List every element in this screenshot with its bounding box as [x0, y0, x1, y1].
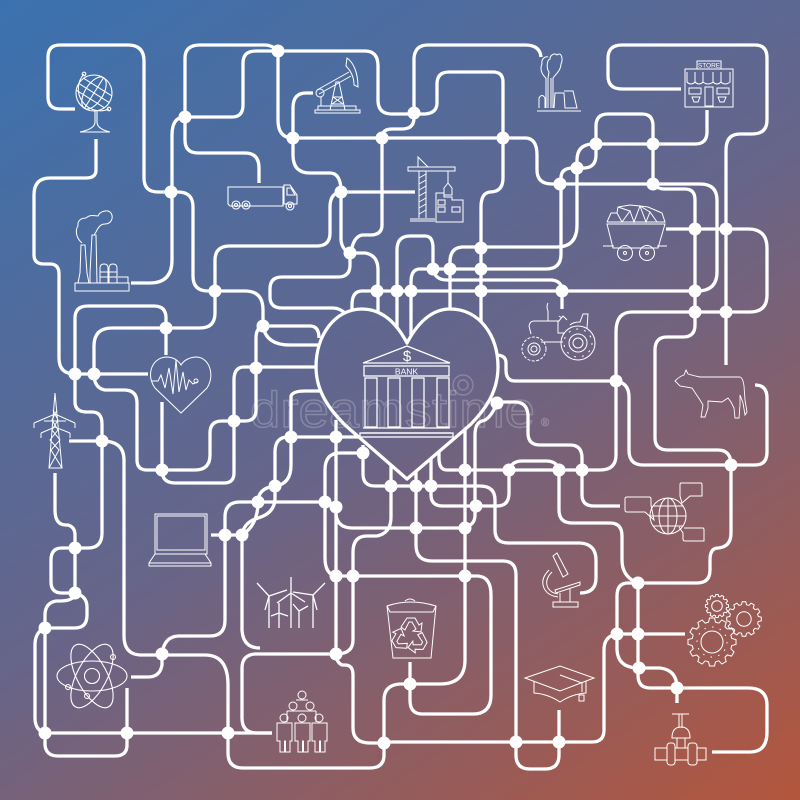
icon: coal cart — [603, 205, 667, 260]
icon: recycling bin — [387, 599, 436, 658]
icon: oil pump jack — [315, 58, 360, 113]
central heart — [316, 309, 498, 479]
watermark: dreamstime — [250, 382, 535, 438]
icon: power plant with cooling towers — [537, 54, 581, 111]
icon: heartbeat heart — [151, 357, 211, 413]
icon: graduation cap — [525, 666, 594, 702]
junction nodes — [38, 44, 738, 750]
icon: electricity pylon — [34, 393, 75, 468]
icon: cow — [675, 370, 747, 418]
icon: microscope — [543, 553, 580, 607]
icon: group of people — [277, 691, 327, 752]
icon: truck — [228, 185, 297, 210]
icon: tractor — [522, 303, 595, 361]
icon: gears — [688, 594, 761, 666]
watermark: ® — [541, 417, 549, 429]
icon: store: STORE — [698, 62, 721, 70]
large gear — [688, 618, 736, 666]
icon: globe with speech boxes — [625, 483, 704, 541]
icon: factory with smoke — [75, 211, 129, 291]
icon: wind turbines — [257, 577, 325, 628]
icon: bank: $ — [403, 348, 412, 365]
icon: desk globe — [69, 68, 119, 132]
icon: atom — [57, 638, 127, 714]
icon: store — [685, 61, 733, 107]
icon: bank — [360, 346, 453, 437]
icon: laptop — [149, 514, 211, 566]
icon: valve on pipe — [655, 714, 706, 765]
small gear — [705, 594, 729, 618]
icon: construction crane and building — [408, 157, 463, 222]
icon: bank: BANK — [395, 366, 418, 376]
right gear — [727, 602, 761, 636]
